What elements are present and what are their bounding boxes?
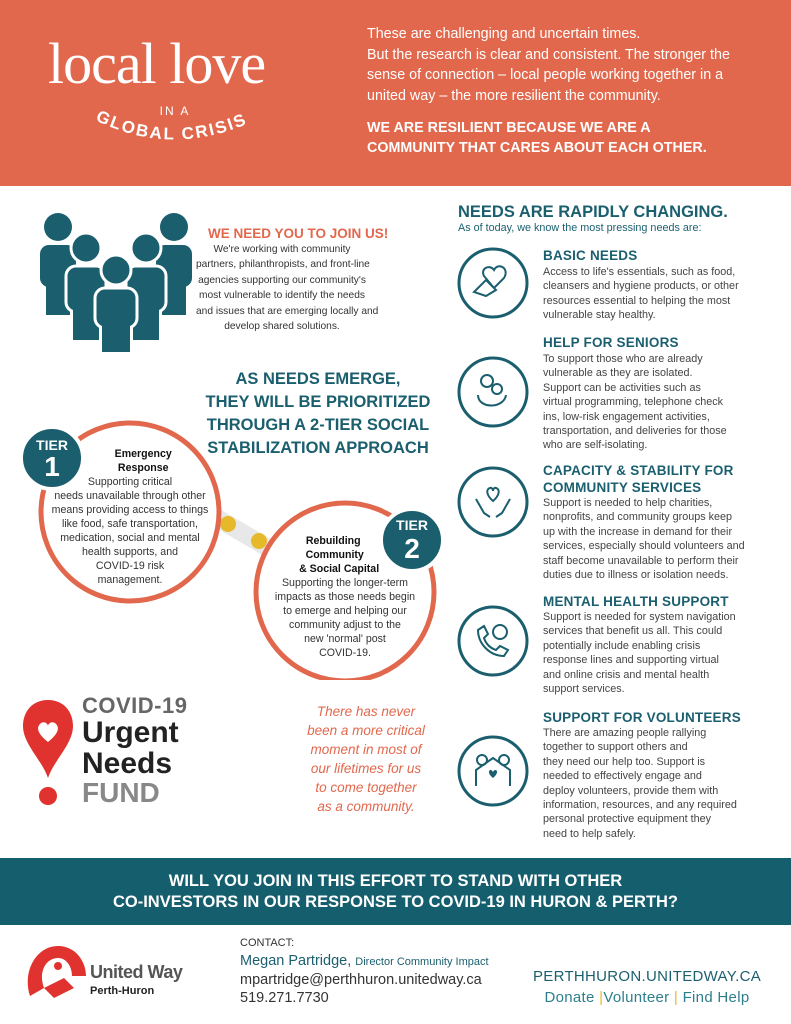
logo: covid-19 urgent needs fund: FUND (82, 777, 160, 808)
tier 1 text: COVID-19 risk (96, 560, 164, 572)
tier 2 text: & Social Capital (299, 563, 379, 575)
heading: 2-tier approach: THROUGH A 2-TIER SOCIAL (207, 416, 429, 434)
text: Support is needed to help charities, (543, 497, 712, 509)
logo: covid-19 urgent needs fund: COVID-19 (82, 693, 187, 718)
need: basic needs: BASIC NEEDS (543, 248, 637, 263)
text: need to help safely. (543, 828, 636, 840)
logo: covid-19 urgent needs fund (23, 693, 187, 808)
tier 2 text (275, 535, 415, 659)
call to action banner: WILL YOU JOIN IN THIS EFFORT TO STAND WITH OTHER (169, 872, 622, 890)
text: up with the increase in demand for their (543, 526, 732, 538)
website links (533, 968, 761, 1006)
website links: Donate |Volunteer | Find Help (544, 989, 749, 1006)
quote (307, 704, 426, 814)
tier 1 text: Emergency (115, 448, 172, 460)
text: resources essential to helping the most (543, 295, 730, 307)
text: virtual programming, telephone check (543, 396, 723, 408)
need: capacity (543, 463, 734, 495)
logo: covid-19 urgent needs fund: Urgent (82, 716, 179, 749)
tier diagram (23, 420, 441, 680)
logo: united way: Perth-Huron (90, 985, 154, 997)
icon: mental health phone (458, 606, 528, 676)
heading: 2-tier approach: AS NEEDS EMERGE, (235, 370, 401, 388)
intro text: sense of connection – local people working together in a (367, 67, 723, 83)
logo: united way (28, 946, 183, 998)
tier 1 text: medication, social and mental (60, 532, 200, 544)
call to action banner (0, 858, 791, 925)
text: together to support others and (543, 741, 688, 753)
contact info: 519.271.7730 (240, 990, 329, 1006)
intro text (367, 26, 730, 104)
text: response lines and supporting virtual (543, 654, 719, 666)
tier 2 text: community adjust to the (289, 619, 401, 631)
tier 1 text (52, 448, 208, 586)
text: join us: and issues that are emerging locally and (196, 306, 378, 317)
tier diagram: 1 (44, 451, 60, 482)
need: capacity: COMMUNITY SERVICES (543, 480, 701, 495)
quote: our lifetimes for us (311, 761, 421, 776)
text: nonprofits, and community groups keep (543, 511, 732, 523)
text: join us (196, 244, 378, 332)
tier diagram: TIER (396, 517, 428, 533)
need: capacity: CAPACITY & STABILITY FOR (543, 463, 734, 478)
heading: we need you: WE NEED YOU TO JOIN US! (208, 226, 388, 241)
quote: as a community. (317, 799, 415, 814)
need: seniors: HELP FOR SENIORS (543, 335, 679, 350)
text: who are self-isolating. (543, 439, 647, 451)
text: ins, low-risk engagement activities, (543, 411, 710, 423)
title: local love: local love (48, 31, 265, 96)
contact info: CONTACT: (240, 937, 294, 949)
tier 2 text: Community (306, 549, 364, 561)
text: vulnerable stay healthy. (543, 309, 656, 321)
quote: There has never (317, 704, 415, 719)
tier 2 text: impacts as those needs begin (275, 591, 415, 603)
quote: to come together (315, 780, 417, 795)
tier 1 text: health supports, and (82, 546, 178, 558)
text: Support can be activities such as (543, 382, 701, 394)
icon: volunteers (458, 736, 528, 806)
text: needed to effectively engage and (543, 770, 702, 782)
contact info: mpartridge@perthhuron.unitedway.ca (240, 972, 482, 988)
intro text: united way – the more resilient the community. (367, 88, 661, 104)
contact info: Megan Partridge, Director Community Impact (240, 953, 489, 969)
resilient statement: WE ARE RESILIENT BECAUSE WE ARE A (367, 120, 651, 136)
subheading: As of today, we know the most pressing needs are: (458, 222, 701, 234)
header band (0, 0, 791, 186)
text: personal protective equipment they (543, 813, 711, 825)
tier 1 text: Response (118, 462, 169, 474)
text: duties due to illness or isolation needs. (543, 569, 728, 581)
tier diagram: TIER (36, 437, 68, 453)
text: cleansers and hygiene products, or other (543, 280, 739, 292)
text: There are amazing people rallying (543, 727, 706, 739)
icon: community services (458, 466, 528, 538)
text: services that benefit us all. This could (543, 625, 722, 637)
text: support services. (543, 683, 625, 695)
quote: been a more critical (307, 723, 425, 738)
text: vulnerable as they are isolated. (543, 367, 692, 379)
subtitle: in a global crisis: IN A (160, 104, 190, 118)
text: potentially include enabling crisis (543, 640, 700, 652)
tier 2 text: Rebuilding (306, 535, 361, 547)
text: Support is needed for system navigation (543, 611, 736, 623)
intro text: But the research is clear and consistent. The stronger the (367, 46, 730, 62)
text: staff become unavailable to perform their (543, 555, 738, 567)
need: mental health: MENTAL HEALTH SUPPORT (543, 594, 729, 609)
website links: PERTHHURON.UNITEDWAY.CA (533, 968, 761, 985)
text: join us: partners, philanthropists, and front-line (196, 259, 370, 270)
tier 2 text: COVID-19. (319, 647, 371, 659)
tier 2 text: Supporting the longer-term (282, 577, 408, 589)
tier diagram: 2 (404, 533, 420, 564)
need: volunteers: SUPPORT FOR VOLUNTEERS (543, 710, 741, 725)
tier 1 text: like food, safe transportation, (62, 518, 198, 530)
heading: 2-tier approach: STABILIZATION APPROACH (207, 439, 429, 457)
icon: people group (40, 213, 192, 352)
intro text: These are challenging and uncertain times. (367, 26, 640, 42)
tier 1 text: means providing access to things (52, 504, 208, 516)
tier 2 text: to emerge and helping our (283, 605, 407, 617)
tier 1 text: Supporting critical (88, 476, 172, 488)
resilient statement (367, 120, 707, 156)
heading: 2-tier approach (206, 370, 430, 457)
contact info (240, 937, 489, 1006)
subtitle: in a global crisis: GLOBAL CRISIS (97, 111, 245, 140)
tier 1 text: management. (98, 574, 162, 586)
text: join us: We're working with community (213, 244, 351, 255)
heading: 2-tier approach: THEY WILL BE PRIORITIZED (206, 393, 430, 411)
call to action banner: CO-INVESTORS IN OUR RESPONSE TO COVID-19 IN HURON & PERTH? (113, 893, 678, 911)
resilient statement: COMMUNITY THAT CARES ABOUT EACH OTHER. (367, 140, 707, 156)
text: and online crisis and mental health (543, 669, 709, 681)
text: transportation, and deliveries for those (543, 425, 727, 437)
logo: covid-19 urgent needs fund: Needs (82, 747, 172, 780)
text: services, especially should volunteers and (543, 540, 745, 552)
text: they need our help too. Support is (543, 756, 705, 768)
text: Access to life's essentials, such as food, (543, 266, 735, 278)
quote: moment in most of (310, 742, 422, 757)
text: join us: most vulnerable to identify the needs (199, 290, 365, 301)
heading: needs are rapidly changing: NEEDS ARE RAPIDLY CHANGING. (458, 203, 728, 221)
tier 2 text: new 'normal' post (304, 633, 386, 645)
text: deploy volunteers, provide them with (543, 785, 718, 797)
text: information, resources, and any required (543, 799, 737, 811)
text: To support those who are already (543, 353, 703, 365)
text: join us: agencies supporting our community's (198, 275, 366, 286)
icon: seniors (458, 356, 528, 428)
icon: basic needs (458, 248, 528, 318)
tier 1 text: needs unavailable through other (54, 490, 206, 502)
logo: united way: United Way (90, 962, 182, 982)
text: join us: develop shared solutions. (224, 321, 340, 332)
